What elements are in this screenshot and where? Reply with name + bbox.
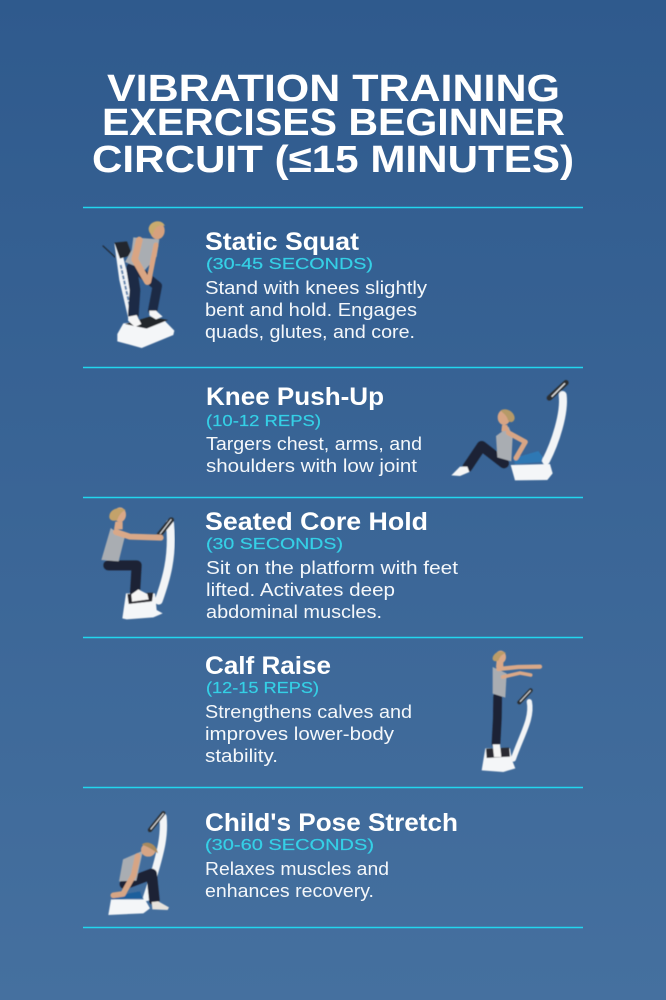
heading: Seated Core Hold xyxy=(205,508,428,536)
reps: (12-15 REPS) xyxy=(206,680,319,697)
panel: static squat xyxy=(103,221,427,348)
panel: seated core hold xyxy=(101,507,458,622)
description: lifted. Activates deep xyxy=(206,580,395,600)
description: Strengthens calves and xyxy=(205,702,412,722)
description xyxy=(206,434,422,476)
icon: person doing dips on vibration machine xyxy=(451,383,566,480)
description: bent and hold. Engages xyxy=(205,300,417,320)
heading: Static Squat xyxy=(205,228,360,256)
description: Relaxes muscles and xyxy=(205,859,389,879)
description: Stand with knees slightly xyxy=(205,278,427,298)
duration: (30-45 SECONDS) xyxy=(206,256,373,273)
heading: Child's Pose Stretch xyxy=(205,809,458,837)
description: quads, glutes, and core. xyxy=(205,322,415,342)
heading: Calf Raise xyxy=(205,652,331,680)
duration: (30-60 SECONDS) xyxy=(205,837,374,854)
description xyxy=(205,859,389,901)
title: VIBRATION TRAINING xyxy=(107,68,560,110)
description xyxy=(205,278,427,342)
panel: calf raise xyxy=(205,651,540,772)
panel: child's pose stretch xyxy=(108,809,458,915)
description: enhances recovery. xyxy=(205,881,374,901)
icon: person in chair pose on vibration machine xyxy=(101,507,171,619)
reps: (10-12 REPS) xyxy=(206,413,321,430)
description xyxy=(205,702,412,766)
heading: Knee Push-Up xyxy=(206,383,384,411)
description: stability. xyxy=(205,746,278,766)
description: Targers chest, arms, and xyxy=(206,434,422,454)
panel: knee push-up xyxy=(206,383,566,480)
title: EXERCISES BEGINNER xyxy=(102,102,565,144)
description: shoulders with low joint xyxy=(206,456,417,476)
icon: person stretching on vibration machine xyxy=(108,813,169,915)
icon: person on tiptoes on vibration machine xyxy=(482,651,540,772)
title xyxy=(92,68,574,181)
description: Sit on the platform with feet xyxy=(206,558,458,578)
description xyxy=(206,558,458,622)
description: abdominal muscles. xyxy=(206,602,382,622)
title: CIRCUIT (≤15 MINUTES) xyxy=(92,139,574,181)
duration: (30 SECONDS) xyxy=(206,536,343,553)
description: improves lower-body xyxy=(205,724,394,744)
icon: person squatting on vibration machine xyxy=(103,221,174,348)
